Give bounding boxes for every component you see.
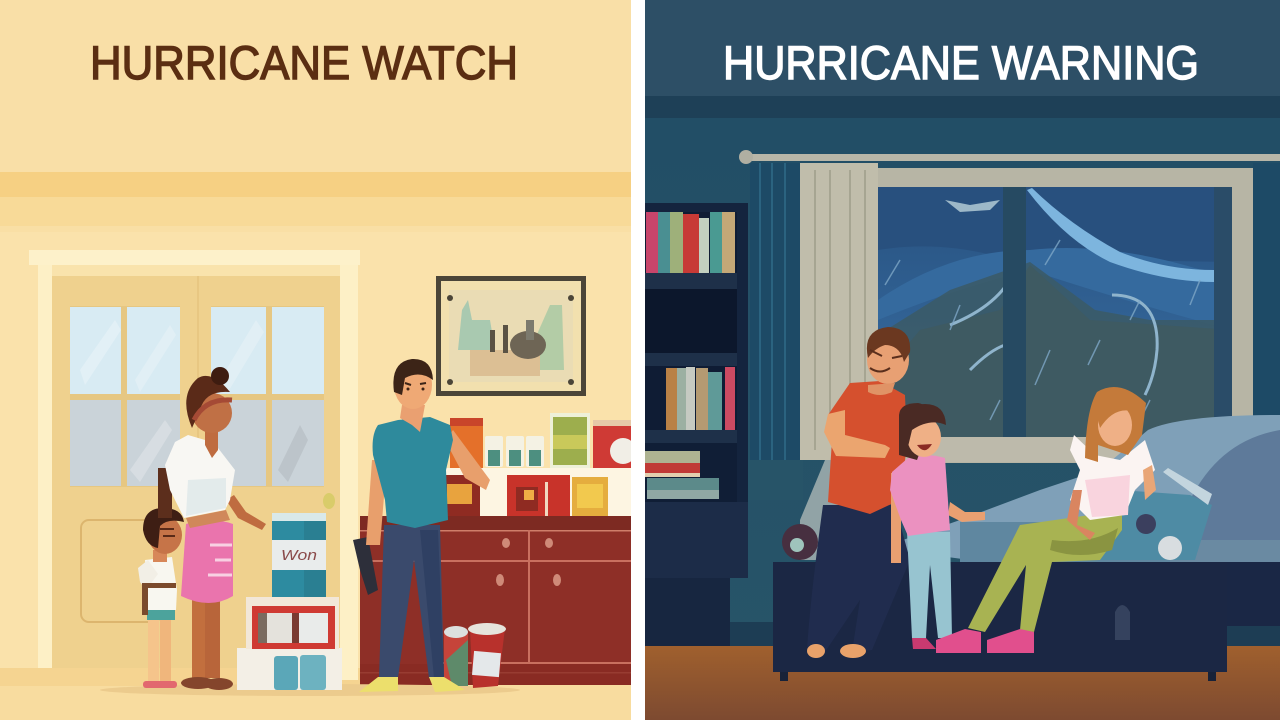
divider xyxy=(631,0,645,720)
small decor globes xyxy=(782,514,1182,560)
framed picture xyxy=(436,276,586,396)
heading: hurricane warning: HURRICANE WARNING xyxy=(723,36,1199,89)
panel: hurricane watch xyxy=(0,0,636,720)
bench chest xyxy=(773,562,1280,681)
cans on floor xyxy=(444,623,506,688)
door with frame xyxy=(29,250,360,680)
beige curtain xyxy=(800,163,878,460)
person: child xyxy=(138,508,184,688)
person: girl xyxy=(890,403,985,649)
stacked boxes and drum: Won xyxy=(281,547,317,564)
bedding xyxy=(800,415,1280,562)
curtain rod xyxy=(739,150,1280,164)
cabinet xyxy=(360,516,631,685)
teal curtain panels xyxy=(748,163,1280,500)
floor shadow xyxy=(100,684,520,696)
stacked boxes and drum xyxy=(237,513,342,690)
person: father xyxy=(807,327,910,658)
shelf with supplies xyxy=(437,413,636,516)
person: man xyxy=(353,359,490,692)
storm window xyxy=(878,168,1253,463)
person: mother xyxy=(936,387,1156,653)
panel: hurricane warning xyxy=(645,0,1280,720)
floor xyxy=(645,622,1280,720)
person: woman xyxy=(158,367,266,690)
heading: hurricane watch: HURRICANE WATCH xyxy=(90,36,518,89)
bookcase xyxy=(645,203,748,662)
